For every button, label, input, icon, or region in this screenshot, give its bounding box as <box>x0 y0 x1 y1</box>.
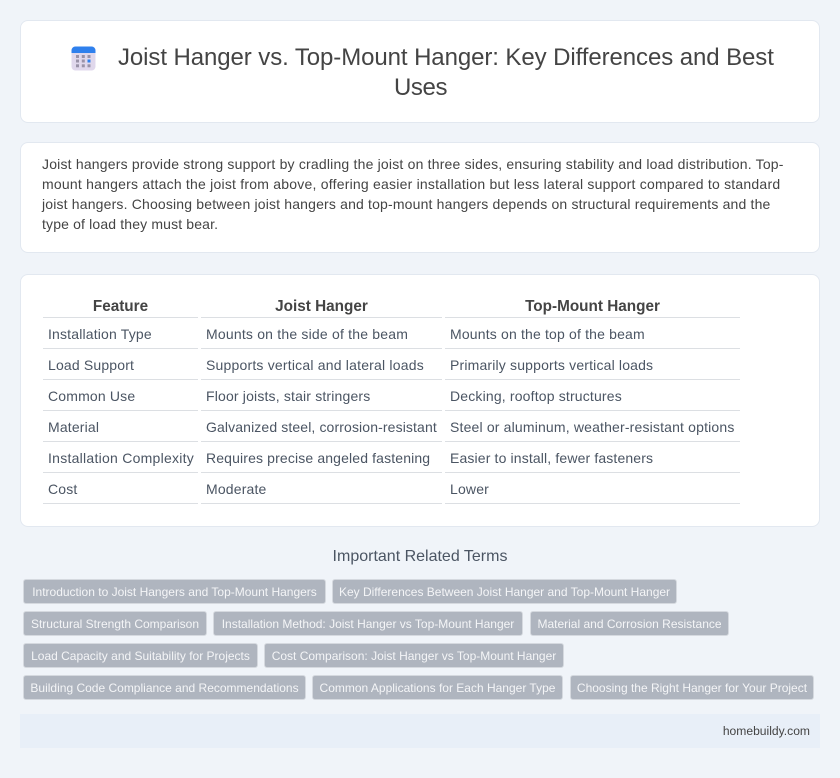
related terms tags: Key Differences Between Joist Hanger and Top-Mount Hanger <box>339 585 670 599</box>
comparison table: Cost <box>48 481 77 497</box>
title: Joist Hanger vs. Top-Mount Hanger: Key Differences and Best <box>118 44 774 71</box>
comparison table: Floor joists, stair stringers <box>206 388 370 404</box>
comparison table: Mounts on the top of the beam <box>450 326 645 342</box>
panel: title card <box>20 20 820 123</box>
intro text: joist hangers. Choosing between joist hangers and top-mount hangers depends on structural requirements and the <box>42 196 770 212</box>
comparison table: Requires precise angeled fastening <box>206 450 430 466</box>
related terms tags: Installation Method: Joist Hanger vs Top-Mount Hanger <box>222 617 514 631</box>
comparison table: Galvanized steel, corrosion-resistant <box>206 419 437 435</box>
comparison table: Load Support <box>48 357 134 373</box>
footer bar <box>20 714 820 748</box>
comparison table: Installation Type <box>48 326 152 342</box>
related terms tags: Choosing the Right Hanger for Your Project <box>577 681 807 695</box>
related terms tags: Common Applications for Each Hanger Type <box>320 681 555 695</box>
related terms tags: Introduction to Joist Hangers and Top-Mount Hangers <box>32 585 317 599</box>
comparison table: Joist Hanger <box>275 298 368 315</box>
intro text: mount hangers attach the joist from above, offering easier installation but less lateral support compared to standard <box>42 176 780 192</box>
panel: comparison table card <box>20 274 820 527</box>
comparison table: Lower <box>450 481 489 497</box>
related terms tags: Cost Comparison: Joist Hanger vs Top-Mount Hanger <box>272 649 556 663</box>
comparison table: Steel or aluminum, weather-resistant options <box>450 419 734 435</box>
related terms heading: Important Related Terms <box>333 548 507 565</box>
related terms tags: Building Code Compliance and Recommendations <box>30 681 299 695</box>
title: Uses <box>394 74 447 101</box>
intro text <box>42 156 784 232</box>
intro text: type of load they must bear. <box>42 216 218 232</box>
related terms tags: Load Capacity and Suitability for Projects <box>31 649 250 663</box>
title <box>118 44 774 101</box>
related terms tags: Material and Corrosion Resistance <box>537 617 722 631</box>
comparison table: Moderate <box>206 481 267 497</box>
comparison table: Top-Mount Hanger <box>525 298 660 315</box>
intro text: Joist hangers provide strong support by cradling the joist on three sides, ensuring stability and load distribution. Top- <box>42 156 784 172</box>
comparison table <box>43 298 740 504</box>
comparison table: Primarily supports vertical loads <box>450 357 653 373</box>
comparison table: Supports vertical and lateral loads <box>206 357 424 373</box>
panel: introduction card <box>20 142 820 253</box>
comparison table: Mounts on the side of the beam <box>206 326 408 342</box>
icon: calendar <box>72 46 96 70</box>
comparison table: Installation Complexity <box>48 450 194 466</box>
related terms tags: Structural Strength Comparison <box>31 617 199 631</box>
comparison table: Easier to install, fewer fasteners <box>450 450 653 466</box>
comparison table: Decking, rooftop structures <box>450 388 622 404</box>
related terms tags <box>23 579 814 700</box>
footer source: homebuildy.com <box>723 724 810 738</box>
comparison table: Material <box>48 419 99 435</box>
comparison table: Feature <box>93 298 148 315</box>
comparison table: Common Use <box>48 388 135 404</box>
